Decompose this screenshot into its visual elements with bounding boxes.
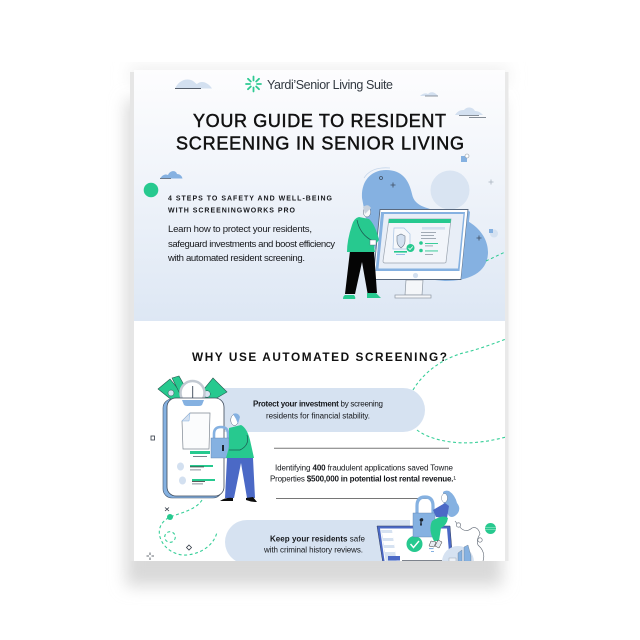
person xyxy=(225,458,255,498)
intro text: safeguard investments and boost efficiency xyxy=(168,239,335,250)
money xyxy=(158,376,228,399)
monitor stand xyxy=(405,280,423,295)
subheading: 4 STEPS TO SAFETY AND WELL-BEING xyxy=(168,196,333,202)
laptop xyxy=(377,526,453,564)
title: SCREENING IN SENIOR LIVING xyxy=(176,134,464,154)
title xyxy=(176,114,463,150)
window lines xyxy=(422,227,445,230)
illustration: person at monitor xyxy=(343,168,505,299)
dashed green paths xyxy=(159,339,506,555)
pill: protect your investment: residents for financial stability. xyxy=(266,412,370,420)
cloud: top right large xyxy=(455,107,486,118)
page sheet xyxy=(134,70,506,578)
cloud: intro xyxy=(160,171,182,179)
icon: green dot xyxy=(144,183,158,197)
icon: logo star xyxy=(246,76,261,92)
icon: small blue square with ring xyxy=(461,154,469,162)
phone xyxy=(163,399,222,498)
lock xyxy=(417,497,433,515)
network of connectors xyxy=(455,521,484,561)
panel: header xyxy=(134,124,505,321)
subheading xyxy=(168,196,332,212)
pill: keep your residents safe xyxy=(225,520,410,564)
cloud: top right small xyxy=(420,92,438,96)
page shadow xyxy=(126,66,508,586)
title: YOUR GUIDE TO RESIDENT xyxy=(193,111,446,131)
person xyxy=(345,251,377,294)
clock circle xyxy=(179,380,206,398)
document xyxy=(182,413,210,449)
intro text xyxy=(167,224,335,264)
monitor body xyxy=(373,210,468,280)
heading: why use automated screening: WHY USE AUTOMATED SCREENING? xyxy=(192,350,447,364)
intro text: with automated resident screening. xyxy=(167,253,305,264)
person body xyxy=(433,503,449,518)
pill: protect your investment xyxy=(215,388,425,432)
green line dot xyxy=(485,523,496,534)
illustration: laptop with lock and person xyxy=(377,491,496,578)
illustration: phone with money and person xyxy=(158,376,257,502)
logo xyxy=(246,76,393,92)
statistic text xyxy=(270,448,456,499)
pill: protect your investment: Protect your investment by screening xyxy=(253,400,383,408)
logo wordmark: Yardi’Senior Living Suite xyxy=(267,78,393,92)
background blob xyxy=(362,170,488,281)
lock xyxy=(214,427,228,440)
intro text: Learn how to protect your residents, xyxy=(168,224,312,235)
small square and circle xyxy=(490,230,498,238)
small marks xyxy=(146,436,192,560)
person hair xyxy=(443,491,459,517)
document with shield xyxy=(393,228,410,249)
content rows xyxy=(190,451,210,454)
sparkles xyxy=(380,176,494,240)
cloud: top left xyxy=(175,79,212,89)
green path dot xyxy=(167,514,173,520)
app window xyxy=(383,219,451,263)
buildings xyxy=(442,546,474,578)
pale circle xyxy=(430,170,470,210)
arc above blob xyxy=(364,168,390,178)
check circle xyxy=(406,536,422,552)
statistic text: Properties $500,000 in potential lost rental revenue.¹ xyxy=(270,474,456,484)
statistic text: Identifying 400 fraudulent applications saved Towne xyxy=(275,464,454,472)
pill: keep your residents safe: Keep your residents safe xyxy=(270,534,366,544)
subheading: WITH SCREENINGWORKS PRO xyxy=(168,208,296,214)
pill: keep your residents safe: with criminal history reviews. xyxy=(263,546,363,554)
